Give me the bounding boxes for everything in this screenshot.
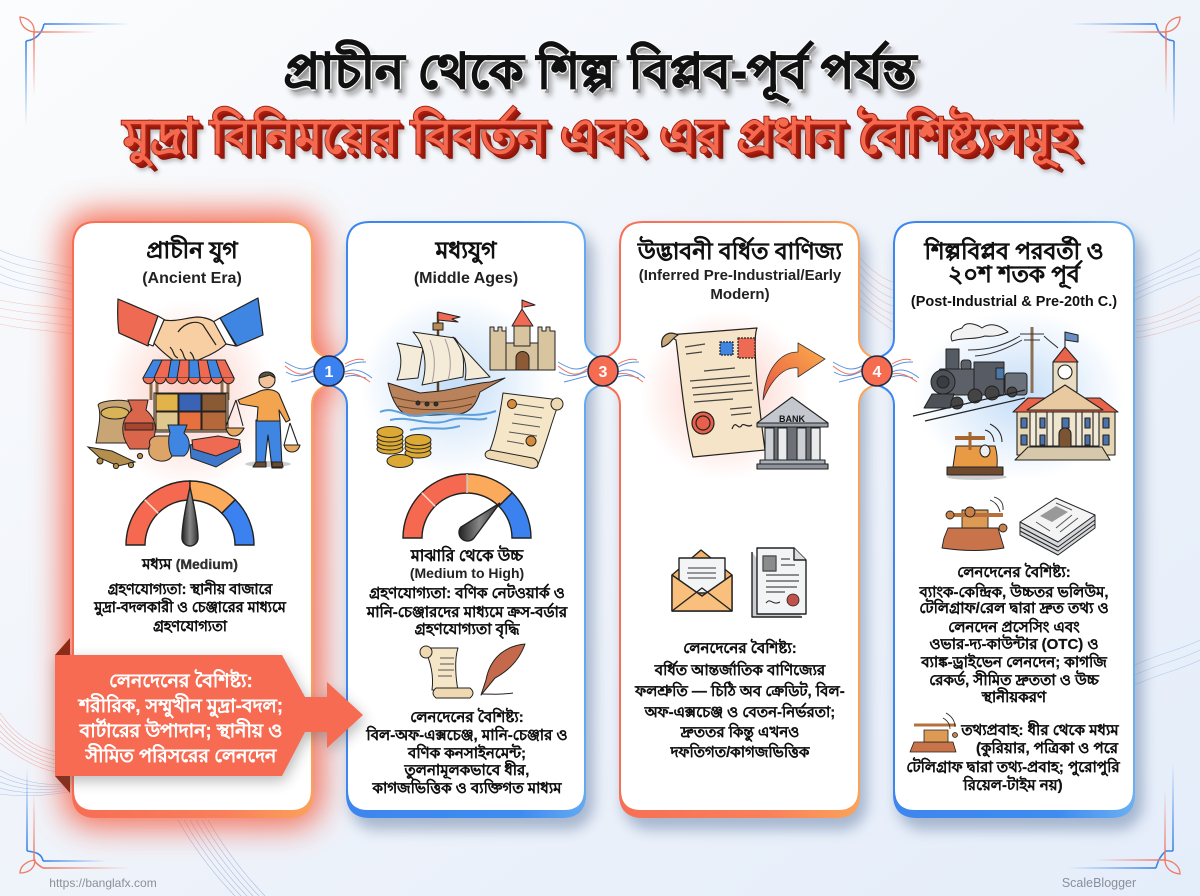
connector 4 [833,356,919,386]
bank label: BANK [779,414,805,424]
gauge: medium to high [403,474,531,541]
connector 3 [558,356,645,386]
connector 4: 4 [873,364,882,381]
transaction text: লেনদেনের বৈশিষ্ট্য: [683,638,797,657]
transaction text: তুলনামূলকভাবে ধীর, [404,760,529,781]
icon: bank [757,397,828,469]
callout: transaction banner: শরীরিক, সম্মুখীন মুদ্রা-বদল; [77,693,283,719]
transaction text: টেলিগ্রাফ/রেল দ্বারা দ্রুত তথ্য ও [919,598,1109,617]
panel frame [877,221,1135,818]
footer credit: ScaleBlogger [1062,876,1136,890]
heading: মধ্যযুগ [435,237,497,265]
icon: handshake [118,298,263,364]
gauge label: মধ্যম (Medium) [141,556,238,573]
acceptance text: মানি-চেঞ্জারদের মাধ্যমে ক্রস-বর্ডার [366,602,568,621]
icon: trader with scales [226,372,300,468]
transaction text: ব্যাঙ্ক-ড্রাইভেন লেনদেন; কাগজি [920,652,1107,671]
transaction text: অফ-এক্সচেঞ্জ ও বেতন-নির্ভরতা; [644,702,835,721]
gauge: medium [126,481,254,546]
icon: small telegraph [942,497,1007,550]
heading: প্রাচীন যুগ [146,235,239,265]
icon: telegraph key [947,424,1007,480]
panel frame [330,221,601,818]
transaction text: কাগজভিত্তিক ও ব্যক্তিগত মাধ্যম [371,778,562,797]
heading: উদ্ভাবনী বর্ধিত বাণিজ্য [637,236,843,264]
illustration glow [103,300,273,490]
acceptance text: গ্রহণযোগ্যতা [153,619,228,635]
callout: transaction banner [55,638,365,793]
information flow text: টেলিগ্রাফ দ্বারা তথ্য-প্রবাহ; পুরোপুরি [906,757,1120,776]
panel frame [72,221,328,818]
transaction text: লেনদেনের বৈশিষ্ট্য: [957,562,1071,581]
icon: letter of credit document [662,328,765,457]
decorative line waves: left and right [0,250,1200,896]
icon: clock tower building [1013,332,1118,460]
icon: scroll and quill [420,644,525,698]
connector 1: 1 [325,364,334,381]
illustration glow [915,310,1125,480]
transaction text: রেকর্ড, সীমিত দ্রুততা ও উচ্চ [929,670,1100,689]
icon: growth arrow [763,343,825,400]
information flow text: তথ্যপ্রবাহ: ধীর থেকে মধ্যম [960,720,1119,739]
callout: transaction banner: সীমিত পরিসরের লেনদেন [85,743,277,767]
icon: newspaper [1020,498,1095,555]
acceptance text: গ্রহণযোগ্যতা বৃদ্ধি [415,619,520,640]
transaction text: বর্ধিত আন্তর্জাতিক বাণিজ্যের [654,660,826,679]
illustration glow [360,295,550,475]
transaction text: দফতিগত/কাগজভিত্তিক [670,742,810,761]
panel: post-industrial [877,221,1135,818]
subtitle: (Middle Ages) [414,270,518,287]
transaction text: বণিক কনসাইনমেন্ট; [407,743,526,762]
icon: sailing ship [380,312,505,430]
icon: stamped document [752,548,806,617]
acceptance text: মুদ্রা-বদলকারী ও চেঞ্জারের মাধ্যমে [93,598,287,616]
icon: castle [490,300,555,370]
acceptance text: গ্রহণযোগ্যতা: বণিক নেটওয়ার্ক ও [369,583,565,602]
callout: transaction banner: লেনদেনের বৈশিষ্ট্য: [109,669,253,692]
heading: শিল্পবিপ্লব পরবর্তী ও [923,236,1104,264]
transaction text: স্থানীয়করণ [981,687,1047,706]
panel body [877,223,1133,810]
panel frame [603,221,875,818]
footer url: https://banglafx.com [49,876,157,890]
subtitle: (Post-Industrial & Pre-20th C.) [911,294,1117,310]
icon: telegraph small [910,713,958,752]
icon: market stall [143,360,234,432]
heading: ২০শ শতক পূর্ব [948,259,1083,289]
panel body [330,223,601,810]
panel body [74,223,328,810]
transaction text: লেনদেনের বৈশিষ্ট্য: [410,707,524,726]
connector 3: 3 [599,364,608,381]
gauge sublabel: (Medium to High) [410,565,524,581]
panel: inferred pre-industrial [603,221,875,818]
icon: goods and pottery [88,400,241,469]
transaction text: ফলশ্রুতি — চিঠি অব ক্রেডিট, বিল- [634,681,845,700]
title line 1: প্রাচীন থেকে শিল্প বিপ্লব-পূর্ব পর্যন্ত [284,45,916,99]
transaction text: ব্যাংক-কেন্দ্রিক, উচ্চতর ভলিউম, [918,582,1109,601]
information flow text: রিয়েল-টাইম নয়) [962,775,1063,794]
subtitle: Modern) [710,286,770,303]
panel shadows [350,230,1143,830]
icon: envelope [672,550,732,611]
transaction text: ওভার-দ্য-কাউন্টার (OTC) ও [930,634,1098,653]
acceptance text: গ্রহণযোগ্যতা: স্থানীয় বাজারে [108,580,273,598]
icon: coins [377,426,431,468]
transaction text: লেনদেন প্রসেসিং এবং [948,617,1080,636]
transaction text: বিল-অফ-এক্সচেঞ্জ, মানি-চেঞ্জার ও [365,725,568,744]
title line 2: মুদ্রা বিনিময়ের বিবর্তন এবং এর প্রধান বৈশিষ্ট্যসমূহ [123,110,1077,164]
icon: charter scroll [485,393,563,468]
panel: ancient era [72,221,328,818]
panel body [603,223,875,810]
information flow text: (কুরিয়ার, পত্রিকা ও পরে [976,738,1119,758]
subtitle: (Ancient Era) [142,270,242,287]
callout: transaction banner: বার্টারের উপাদান; স্থানীয় ও [79,718,282,742]
transaction text: দ্রুততর কিন্তু এখনও [680,722,799,742]
panel: middle ages [330,221,601,818]
icon: steam train [913,324,1027,421]
gauge label: মাঝারি থেকে উচ্চ [410,545,524,565]
subtitle: (Inferred Pre-Industrial/Early [639,267,842,284]
illustration glow [640,310,810,480]
connector 1 [285,356,372,386]
panel glow [72,221,328,818]
icon: telegraph pole [968,327,1058,393]
